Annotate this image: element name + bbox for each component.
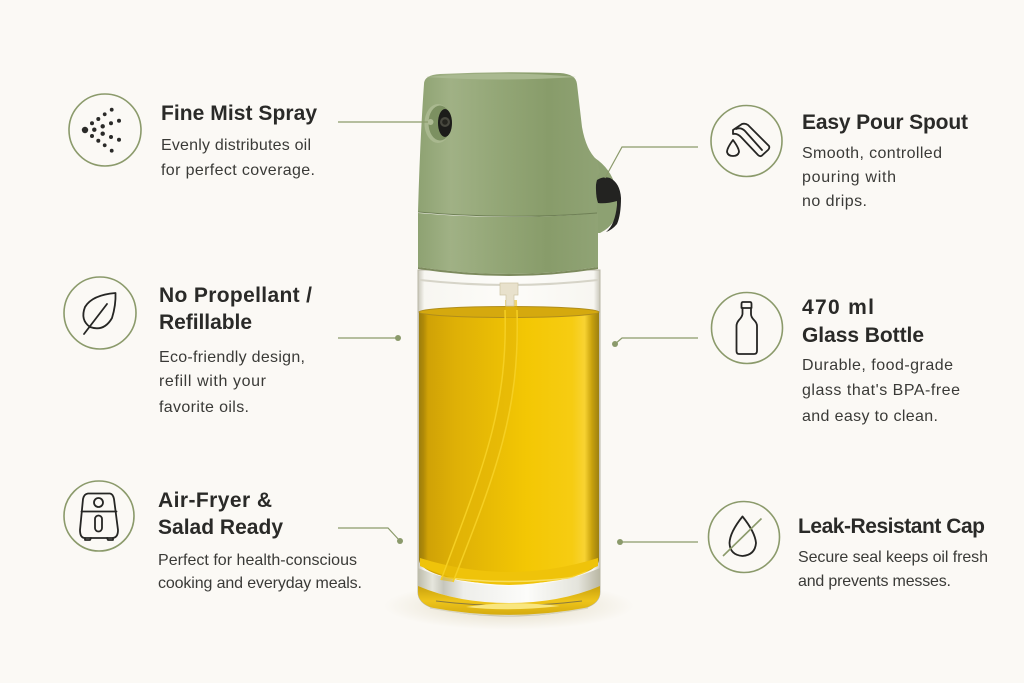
side bump <box>585 155 618 233</box>
heading: Salad Ready <box>158 516 283 539</box>
glass base <box>418 568 600 616</box>
description <box>802 357 960 425</box>
icon: mist dots <box>69 94 141 166</box>
heading: Easy Pour Spout <box>802 111 968 134</box>
description: Perfect for health-conscious <box>158 552 357 569</box>
description <box>802 145 942 210</box>
callout: air-fryer <box>64 481 362 592</box>
description: Durable, food-grade <box>802 357 953 374</box>
description: Secure seal keeps oil fresh <box>798 549 988 566</box>
olive oil <box>419 306 599 585</box>
icon: leaf <box>64 277 136 349</box>
description: glass that's BPA-free <box>802 382 960 399</box>
description <box>161 137 315 179</box>
description: Smooth, controlled <box>802 145 942 162</box>
description: cooking and everyday meals. <box>158 575 362 592</box>
product: oil spray bottle <box>384 72 634 630</box>
description: favorite oils. <box>159 399 249 416</box>
icon: pour spout <box>711 106 782 176</box>
description: Evenly distributes oil <box>161 137 311 154</box>
description: Eco-friendly design, <box>159 349 305 366</box>
callout: no propellant <box>64 277 312 416</box>
heading: Leak-Resistant Cap <box>798 515 985 538</box>
trigger <box>596 177 621 232</box>
heading: No Propellant / <box>159 284 312 307</box>
icon: crossed drop <box>708 502 780 572</box>
heading <box>158 489 283 539</box>
callout: leak-resistant cap <box>708 502 988 590</box>
icon: bottle <box>712 292 782 364</box>
heading <box>802 296 924 347</box>
description: no drips. <box>802 193 867 210</box>
collar <box>418 213 598 276</box>
description: and prevents messes. <box>798 573 951 590</box>
description: for perfect coverage. <box>161 162 315 179</box>
description: pouring with <box>802 169 896 186</box>
description <box>159 349 305 416</box>
callout lines <box>338 122 698 545</box>
description: refill with your <box>159 373 267 390</box>
heading <box>159 284 312 334</box>
glass bottle <box>418 270 600 616</box>
upper cap <box>418 72 600 216</box>
description <box>158 552 362 592</box>
callout: glass bottle <box>712 292 960 425</box>
description <box>798 549 988 590</box>
description: and easy to clean. <box>802 408 938 425</box>
dip tube <box>441 283 518 582</box>
heading: Fine Mist Spray <box>161 102 317 125</box>
heading: Air-Fryer & <box>158 489 272 512</box>
heading: Glass Bottle <box>802 324 924 347</box>
heading: Refillable <box>159 311 252 334</box>
spray nozzle <box>424 104 452 143</box>
callout: easy pour spout <box>711 106 968 210</box>
heading: 470 ml <box>802 296 874 319</box>
callout: fine mist spray <box>69 94 317 179</box>
icon: air fryer <box>64 481 134 551</box>
